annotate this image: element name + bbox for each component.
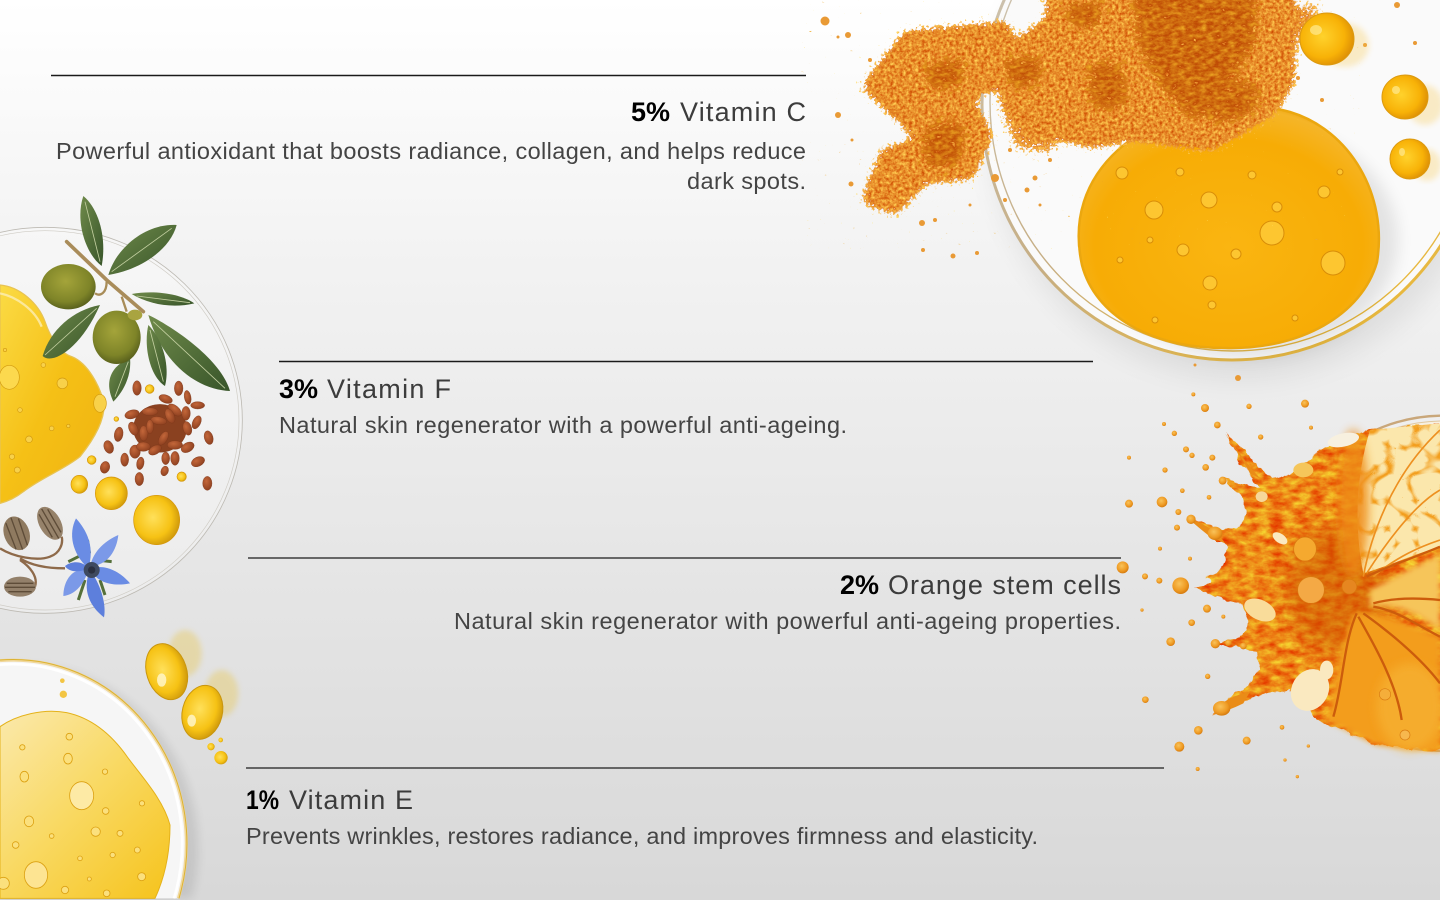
oil blob [0,285,106,503]
glass dish ring [0,227,242,613]
middle right citrus segment [1370,555,1440,630]
illustration: vitamin F botanicals dish [0,196,242,617]
description: Vitamin C: Powerful antioxidant that boosts radiance, collagen, and helps reduce [56,138,806,164]
section: 1% Vitamin E [246,768,1164,849]
oil capsules [1300,13,1440,181]
description: Orange stem cells: Natural skin regenerator with powerful anti-ageing properties. [454,608,1121,634]
lower citrus segment with veins [1327,547,1440,752]
section: 2% Orange stem cells [248,558,1121,634]
heading: 5% Vitamin C: Vitamin C [680,97,806,127]
heading: 1% Vitamin E: 1% [246,785,279,815]
description: Vitamin F: Natural skin regenerator with a powerful anti-ageing. [279,412,847,438]
illustration: vitamin E oil dish and capsules [0,630,238,898]
softgel capsules [139,630,238,764]
flying droplets [1117,392,1313,778]
oil bubbles [0,733,146,897]
upper right pale citrus cells [1358,423,1440,573]
pale splash patches [1241,430,1360,718]
section: 3% Vitamin F [279,362,1093,438]
description: Vitamin C: dark spots. [687,168,806,194]
heading: 3% Vitamin F: 3% [279,374,318,404]
heading: 3% Vitamin F: Vitamin F [327,374,451,404]
citrus membranes [1338,430,1440,577]
orange splash [1187,423,1440,752]
description: Vitamin E: Prevents wrinkles, restores radiance, and improves firmness and elasticity. [246,823,1038,849]
heading: 2% Orange stem cells: Orange stem cells [888,570,1121,600]
heading: 5% Vitamin C: 5% [631,97,670,127]
illustration: orange stem cell splash [1117,392,1440,778]
oil pool [1079,107,1398,358]
illustration: vitamin C powder and oil dish [820,0,1440,381]
oil bubbles [0,348,106,473]
bubbles on splash [1294,537,1410,740]
flax seeds [99,381,215,490]
heading: 2% Orange stem cells: 2% [840,570,879,600]
borage seed pods [0,502,68,597]
glass dish [0,659,187,898]
powder specks [820,2,1417,381]
dish ring [1276,416,1440,751]
section: 5% Vitamin C [51,76,806,194]
blue borage flower [63,518,130,617]
turmeric powder pile [862,0,1322,214]
description: Vitamin C [56,138,806,194]
heading: 1% Vitamin E: Vitamin E [289,785,413,815]
oil bubbles [1116,167,1345,323]
oil pool [0,678,170,898]
glass petri dish [982,0,1440,360]
olive branch [41,196,230,402]
oil droplets [71,385,186,545]
